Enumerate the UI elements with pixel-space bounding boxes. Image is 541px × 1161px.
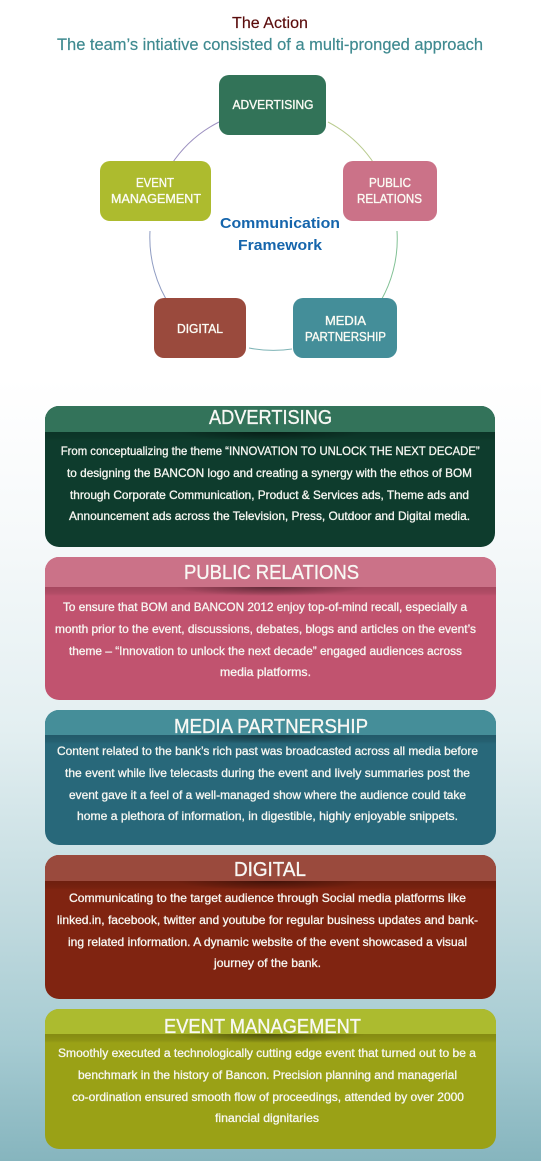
- connector arc: advertising to public relations: [328, 122, 375, 165]
- body text: month prior to the event, discussions, debates, blogs and articles on the event’s: [55, 622, 476, 636]
- body text: linked.in, facebook, twitter and youtube for regular business updates and bank-: [57, 913, 478, 927]
- node: digital: DIGITAL: [177, 322, 223, 336]
- body text: co-ordination ensured smooth flow of proceedings, attended by over 2000: [72, 1090, 464, 1104]
- node: event management: [100, 161, 211, 221]
- diagram: communication framework cycle: [100, 75, 437, 358]
- subtitle: The team’s intiative consisted of a multi-pronged approach: [57, 35, 483, 54]
- body text: event gave it a feel of a well-managed show where the audience could take: [69, 788, 466, 802]
- heading: MEDIA PARTNERSHIP: [174, 715, 368, 738]
- heading: DIGITAL: [234, 858, 306, 881]
- node: media partnership: MEDIA: [325, 314, 367, 328]
- body text: theme – “Innovation to unlock the next decade” engaged audiences across: [69, 644, 462, 658]
- node: public relations: PUBLIC: [369, 176, 411, 190]
- connector arc: public relations to media partnership: [377, 231, 397, 307]
- node: media partnership: [293, 298, 397, 358]
- body text: [57, 891, 478, 970]
- panel: public relations: [45, 557, 496, 700]
- body text: the event while live telecasts during the event and lively summaries post the: [65, 766, 470, 780]
- panel: event management: [45, 1009, 496, 1149]
- node: advertising: ADVERTISING: [232, 98, 314, 112]
- body text: Communicating to the target audience through Social media platforms like: [69, 891, 466, 905]
- body text: media platforms.: [220, 665, 311, 679]
- node: public relations: RELATIONS: [357, 192, 422, 206]
- body text: To ensure that BOM and BANCON 2012 enjoy top-of-mind recall, especially a: [63, 600, 467, 614]
- center label: Communication: [220, 215, 340, 232]
- center label: Framework: [238, 237, 323, 254]
- body text: home a plethora of information, in digestible, highly enjoyable snippets.: [77, 809, 458, 823]
- panel: media partnership: [45, 710, 496, 845]
- node: event management: EVENT: [136, 176, 174, 190]
- panel: advertising: [45, 406, 495, 547]
- body text: [61, 444, 480, 523]
- connector arc: media partnership to digital: [249, 348, 292, 350]
- body text: [58, 1046, 476, 1125]
- body text: benchmark in the history of Bancon. Precision planning and managerial: [78, 1068, 457, 1082]
- connector arc: digital to event management: [150, 231, 171, 307]
- node: public relations: [343, 161, 437, 221]
- heading: PUBLIC RELATIONS: [184, 561, 359, 584]
- center label: [220, 215, 340, 254]
- body text: through Corporate Communication, Product & Services ads, Theme ads and: [70, 488, 469, 502]
- body text: ing related information. A dynamic website of the event showcased a visual: [68, 935, 467, 949]
- node: digital: [154, 298, 246, 358]
- node: event management: MANAGEMENT: [111, 192, 201, 206]
- body text: Content related to the bank’s rich past was broadcasted across all media before: [57, 744, 478, 758]
- panel: digital: [45, 855, 496, 999]
- heading: EVENT MANAGEMENT: [164, 1015, 361, 1038]
- heading: ADVERTISING: [209, 406, 332, 429]
- node: media partnership: PARTNERSHIP: [305, 330, 386, 344]
- body text: journey of the bank.: [213, 956, 321, 970]
- body text: From conceptualizing the theme “INNOVATION TO UNLOCK THE NEXT DECADE”: [61, 444, 480, 458]
- connector arc: event management to advertising: [171, 122, 219, 165]
- body text: to designing the BANCON logo and creating a synergy with the ethos of BOM: [67, 466, 472, 480]
- node: advertising: [219, 75, 326, 135]
- title: The Action: [232, 15, 308, 32]
- body text: [55, 600, 476, 679]
- body text: [57, 744, 478, 823]
- body text: Announcement ads across the Television, Press, Outdoor and Digital media.: [69, 509, 470, 523]
- body text: Smoothly executed a technologically cutting edge event that turned out to be a: [58, 1046, 476, 1060]
- body text: financial dignitaries: [215, 1111, 319, 1125]
